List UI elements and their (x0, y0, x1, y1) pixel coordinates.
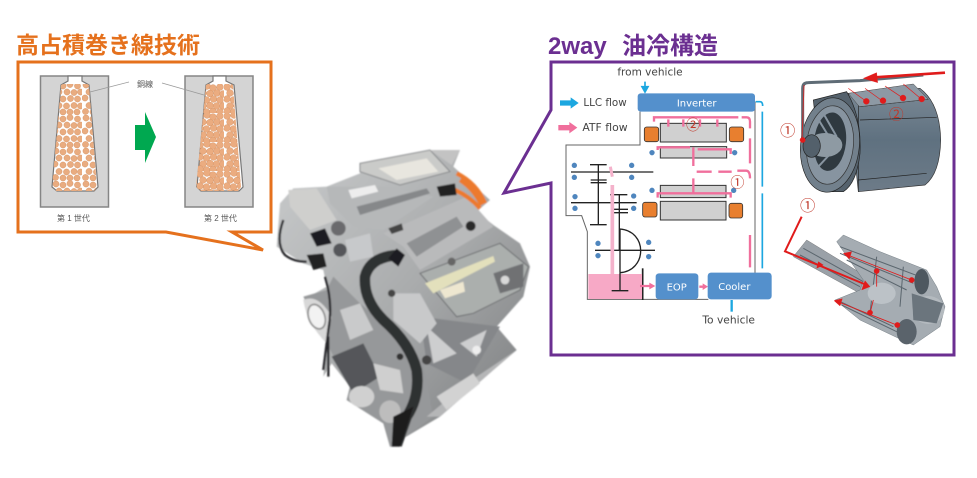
marker 2: ② (889, 106, 904, 123)
block: EOP (656, 273, 698, 299)
label: to vehicle: To vehicle (701, 314, 755, 326)
block: inverter: Inverter (677, 99, 717, 110)
title: 2way oil cooling structure: 2way (548, 33, 607, 60)
LLC flow paths (732, 102, 763, 312)
ATF flow paths (610, 117, 750, 287)
bearings (572, 150, 737, 259)
legend: ATF flow: ATF flow (582, 122, 628, 134)
label: first generation: 第 1 世代 (57, 213, 90, 223)
markers in circuit (686, 117, 744, 191)
label: copper wire with leader lines (90, 79, 204, 95)
title: 2way oil cooling structure: 油冷構造 (622, 33, 718, 60)
diagram: first generation slot (40, 76, 108, 207)
block: cooler: Cooler (718, 282, 751, 293)
illustration: stator with oil pipe (780, 73, 945, 195)
red oil arrows (785, 217, 914, 328)
lower gear case (303, 277, 433, 447)
arrow: LLC in (642, 82, 648, 92)
top housing (383, 197, 493, 270)
left connectors (288, 188, 337, 230)
marker 1: ① (780, 123, 795, 140)
wire harness (280, 220, 330, 377)
black coolant hose (365, 255, 417, 445)
marker 1: ① (800, 198, 815, 215)
markers in circuit: ① (730, 175, 744, 191)
block: EOP: EOP (667, 283, 687, 294)
label: second generation: 第 2 世代 (204, 213, 237, 223)
diagram: second generation slot (185, 76, 253, 207)
oil sump (588, 274, 642, 299)
photo: e-axle unit (277, 150, 530, 447)
legend: LLC flow: LLC flow (583, 97, 627, 109)
label: copper wire with leader lines: 銅線 (137, 79, 153, 89)
housing outline (566, 102, 755, 299)
block: inverter (638, 93, 755, 112)
legend: LLC flow (560, 97, 627, 109)
illustration: rotor with oil path (785, 198, 945, 345)
title: 2way oil cooling structure (548, 33, 718, 60)
rotor (793, 235, 945, 345)
gear train (571, 165, 655, 300)
oil pipe (803, 75, 923, 142)
legend: ATF flow (558, 122, 628, 134)
panel: 2way oil cooling callout (504, 62, 954, 355)
orange cables (455, 173, 485, 208)
label: from vehicle: from vehicle (617, 67, 683, 79)
block: cooler (708, 273, 772, 299)
diagram: cooling circuit (558, 67, 772, 326)
inverter cover (420, 243, 528, 317)
front flange (796, 95, 864, 195)
panel: winding technology callout (18, 62, 271, 250)
motor parts (660, 123, 727, 220)
markers in circuit: ② (686, 117, 700, 133)
unit silhouette (277, 150, 530, 447)
stator body (848, 88, 941, 192)
title: high fill-factor winding: 高占積巻き線技術 (16, 32, 200, 58)
arrow: generation progress (135, 112, 156, 163)
red oil arrows (800, 73, 945, 143)
